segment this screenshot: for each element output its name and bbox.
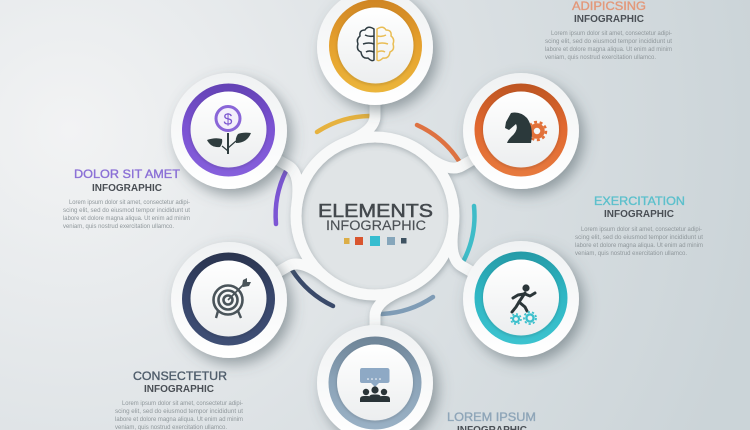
node: money plant (purple) bbox=[171, 73, 287, 189]
center title bbox=[318, 200, 433, 246]
icon: speech bubble bbox=[360, 368, 390, 387]
text block: exercitation: labore et dolore magna aliqua. Ut enim ad minim bbox=[575, 242, 703, 249]
text block: consectetur bbox=[115, 369, 243, 430]
text block: adipiscing bbox=[545, 0, 672, 61]
text block: exercitation: INFOGRAPHIC bbox=[604, 209, 674, 220]
colored arcs around central ring bbox=[276, 116, 474, 314]
text block: exercitation: veniam, quis nostrud exercitation ullamco. bbox=[575, 250, 687, 257]
text block: consectetur: labore et dolore magna aliqua. Ut enim ad minim bbox=[115, 416, 243, 423]
text block: dolor sit amet: INFOGRAPHIC bbox=[92, 183, 162, 194]
text block: adipiscing: scing elit, sed do eiusmod tempor incididunt ut bbox=[545, 38, 672, 45]
text block: exercitation: EXERCITATION bbox=[594, 194, 685, 208]
icon: people bbox=[360, 386, 390, 402]
icon: target bbox=[214, 278, 251, 318]
text block: dolor sit amet: Lorem ipsum dolor sit amet, consectetur adipi- bbox=[69, 199, 190, 206]
icon: plant bbox=[207, 133, 251, 154]
text block: adipiscing: labore et dolore magna aliqua. Ut enim ad minim bbox=[545, 46, 672, 53]
center title: ELEMENTS bbox=[318, 200, 433, 221]
text block: consectetur: scing elit, sed do eiusmod tempor incididunt ut bbox=[115, 408, 243, 415]
text block: adipiscing: INFOGRAPHIC bbox=[574, 14, 644, 25]
icon: gears bbox=[511, 312, 536, 324]
text block: dolor sit amet: DOLOR SIT AMET bbox=[74, 167, 181, 181]
node: brain (gold) bbox=[317, 0, 433, 105]
icon: runner bbox=[512, 284, 535, 312]
node: people (blue grey) bbox=[317, 325, 433, 430]
icon: coin: $ bbox=[224, 112, 233, 128]
text block: dolor sit amet: scing elit, sed do eiusmod tempor incididunt ut bbox=[63, 207, 190, 214]
node: target (navy) bbox=[171, 242, 287, 358]
text block: adipiscing: Lorem ipsum dolor sit amet, consectetur adipi- bbox=[551, 30, 672, 37]
text block: exercitation bbox=[575, 194, 703, 257]
text block: dolor sit amet: labore et dolore magna aliqua. Ut enim ad minim bbox=[63, 215, 190, 222]
text block: consectetur: CONSECTETUR bbox=[133, 369, 227, 383]
text block: lorem ipsum: LOREM IPSUM bbox=[447, 410, 536, 424]
text block: dolor sit amet: veniam, quis nostrud exercitation ullamco. bbox=[63, 223, 174, 230]
text block: exercitation: Lorem ipsum dolor sit amet, consectetur adipi- bbox=[581, 226, 702, 233]
node: knight (orange) bbox=[463, 73, 579, 189]
text block: consectetur: Lorem ipsum dolor sit amet, consectetur adipi- bbox=[122, 400, 243, 407]
text block: lorem ipsum bbox=[447, 410, 536, 430]
central disc bbox=[299, 140, 451, 292]
icon: brain bbox=[357, 27, 394, 61]
center title: INFOGRAPHIC bbox=[326, 218, 426, 233]
central ring with connectors bbox=[267, 91, 483, 341]
text block: adipiscing: veniam, quis nostrud exercitation ullamco. bbox=[545, 54, 656, 61]
text block: consectetur: INFOGRAPHIC bbox=[144, 384, 214, 395]
text block: exercitation: scing elit, sed do eiusmod tempor incididunt ut bbox=[575, 234, 703, 241]
text block: dolor sit amet bbox=[63, 167, 190, 230]
node: runner (teal) bbox=[463, 241, 579, 357]
icon: knight bbox=[505, 113, 532, 143]
icon: gear bbox=[528, 122, 546, 140]
